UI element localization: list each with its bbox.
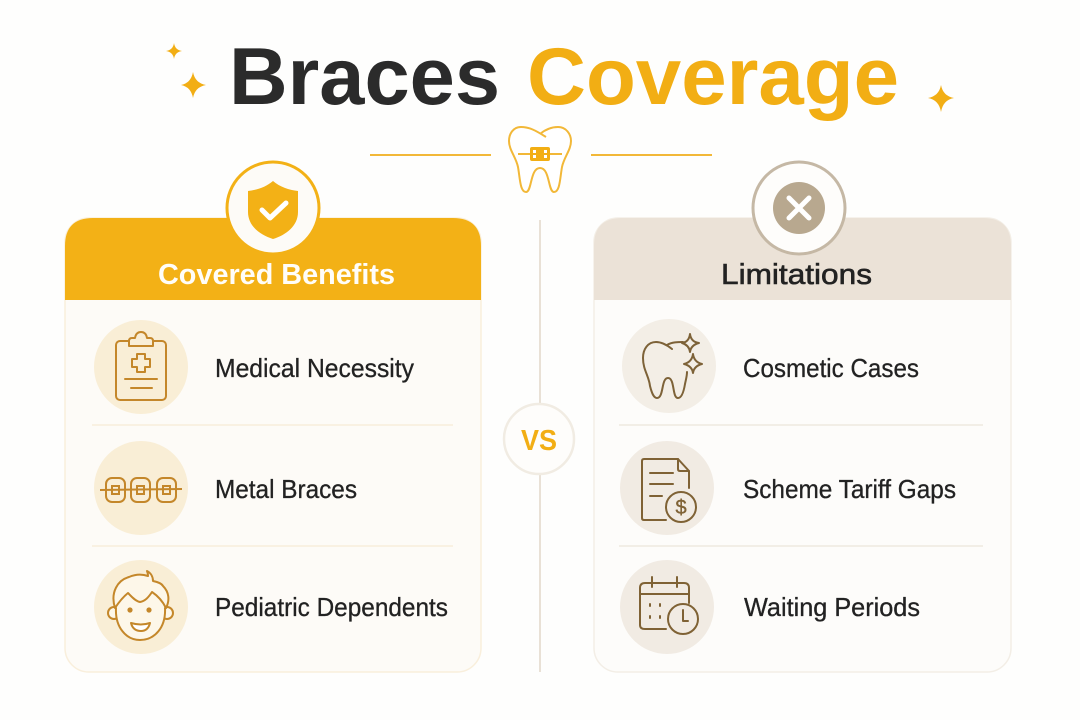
vs badge xyxy=(504,404,574,474)
panel: limitations xyxy=(594,162,1011,672)
divider with tooth icon xyxy=(370,127,712,192)
icon: braces xyxy=(100,478,182,502)
row: scheme tariff gaps: $ xyxy=(675,497,687,519)
row: medical necessity xyxy=(94,320,414,414)
label: Medical Necessity xyxy=(215,353,414,383)
heading: Limitations xyxy=(721,259,872,291)
panel header xyxy=(594,218,1011,300)
panel body xyxy=(65,218,481,672)
icon: calendar with clock xyxy=(640,577,698,634)
icon: sparkling tooth xyxy=(643,334,702,398)
icon: tooth with bracket xyxy=(509,127,571,192)
heading: Covered Benefits xyxy=(158,259,395,291)
row: scheme tariff gaps xyxy=(620,441,956,535)
label: Waiting Periods xyxy=(744,592,920,622)
label: Pediatric Dependents xyxy=(215,592,448,622)
row: metal braces xyxy=(94,441,357,535)
icon: x mark xyxy=(753,162,845,254)
panel header xyxy=(65,218,481,300)
panel body xyxy=(594,218,1011,672)
panel: covered benefits xyxy=(65,162,481,672)
title: Braces xyxy=(229,32,500,122)
icon: shield check xyxy=(227,162,319,254)
center vertical divider xyxy=(539,220,541,672)
icon: document with dollar xyxy=(642,459,696,522)
row: waiting periods xyxy=(620,560,920,654)
icon: child face xyxy=(108,571,173,640)
label: Scheme Tariff Gaps xyxy=(743,474,956,504)
row: cosmetic cases xyxy=(622,319,919,413)
label: Metal Braces xyxy=(215,474,357,504)
icon: clipboard xyxy=(116,332,166,400)
icon: sparkles xyxy=(166,43,954,112)
vs badge: VS xyxy=(521,425,557,457)
row: pediatric dependents xyxy=(94,560,448,654)
label: Cosmetic Cases xyxy=(743,353,919,383)
title xyxy=(229,32,899,122)
title: Coverage xyxy=(527,32,899,122)
